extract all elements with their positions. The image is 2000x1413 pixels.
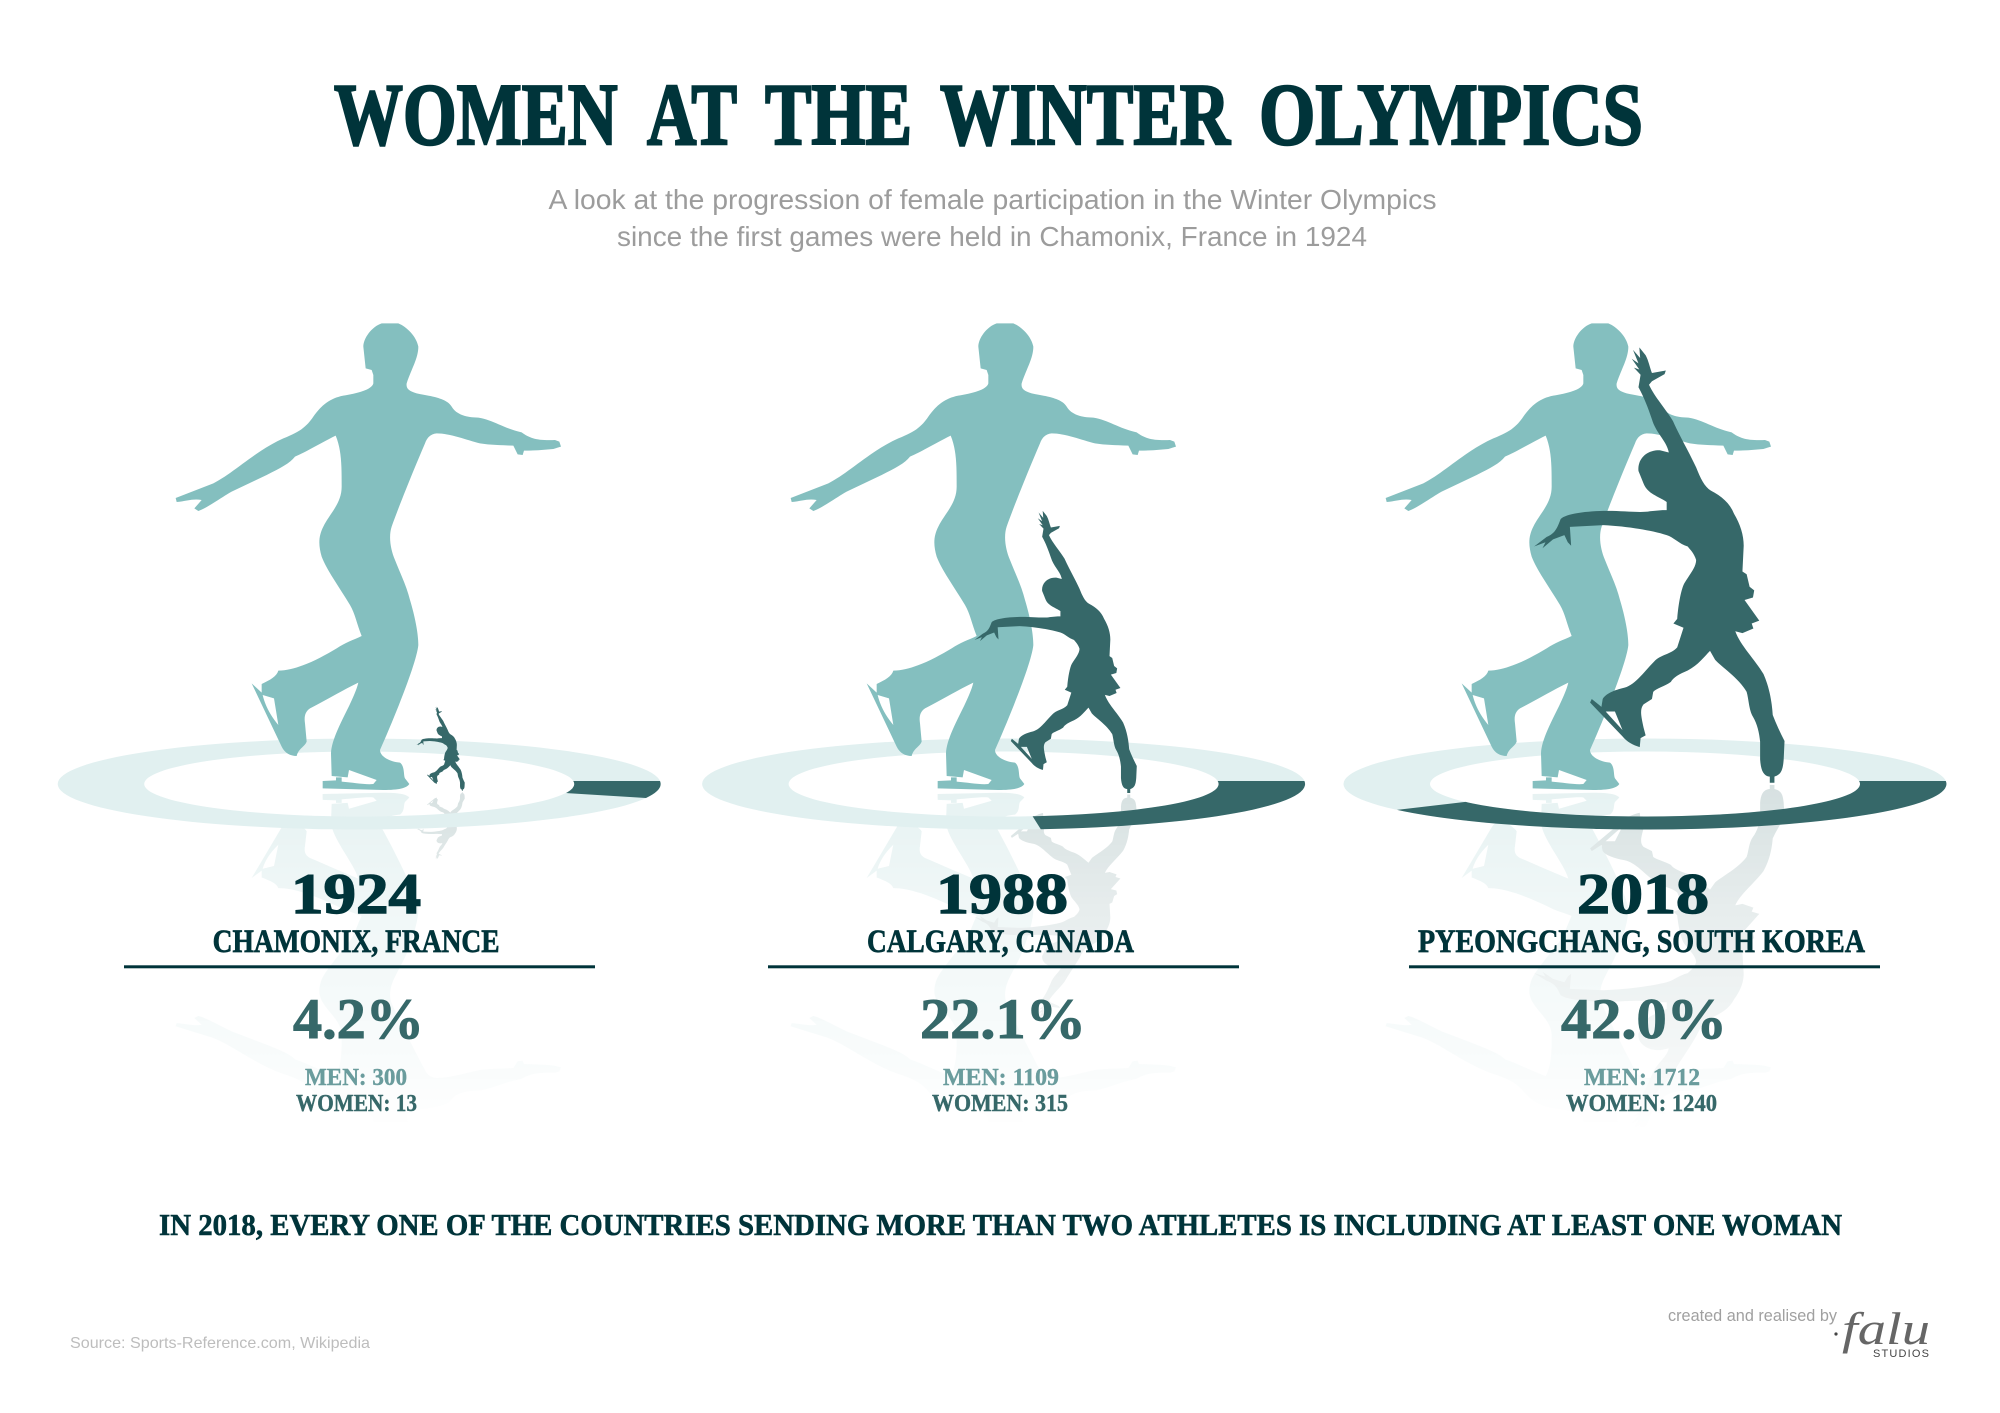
year and location 1924: 1924 — [291, 863, 421, 926]
panel: 1988 Calgary — [702, 323, 1305, 1117]
panel: 1924 Chamonix — [58, 323, 661, 1117]
year and location 2018: PYEONGCHANG, SOUTH KOREA — [1418, 924, 1865, 960]
credit and studio logo: STUDIOS — [1873, 1348, 1929, 1360]
year and location 2018: 2018 — [1577, 863, 1709, 926]
title — [334, 67, 1643, 164]
panel: 2018 Pyeongchang — [1344, 323, 1946, 1117]
credit and studio logo — [1668, 1303, 1930, 1360]
stats 1924: 4.2% — [293, 988, 424, 1051]
ice ring: 22.1 percent share — [702, 738, 1305, 830]
woman silhouette 1924 — [416, 707, 465, 791]
subtitle: A look at the progression of female participation in the Winter Olympics — [548, 184, 1436, 215]
year and location 1988: CALGARY, CANADA — [867, 924, 1134, 960]
stats 2018 — [1561, 988, 1727, 1117]
ice ring: 4.2 percent share — [58, 739, 661, 830]
credit and studio logo: falu — [1842, 1303, 1930, 1354]
subtitle — [548, 184, 1436, 252]
key takeaway statement: IN 2018, EVERY ONE OF THE COUNTRIES SENDING MORE THAN TWO ATHLETES IS INCLUDING AT LEAST ONE WOMAN — [159, 1207, 1842, 1242]
stats 1924: MEN: 300 — [305, 1065, 407, 1091]
year and location 1924: CHAMONIX, FRANCE — [213, 924, 500, 960]
reflections of the skaters on the ice — [195, 785, 1784, 1074]
woman silhouette 1988 — [975, 511, 1137, 793]
title: WINTER — [940, 67, 1231, 164]
year and location 2018 — [1409, 863, 1880, 968]
woman silhouette 2018 — [1534, 347, 1785, 783]
stats 1924 — [293, 988, 424, 1117]
year and location 1988 — [768, 863, 1239, 968]
man silhouette 1924 — [176, 323, 561, 790]
source note: Source: Sports-Reference.com, Wikipedia — [70, 1335, 370, 1352]
man silhouette 2018 — [1386, 323, 1771, 790]
stats 1924: WOMEN: 13 — [296, 1091, 417, 1117]
stats 1988 — [920, 988, 1086, 1117]
man silhouette 1988 — [791, 323, 1176, 790]
title: OLYMPICS — [1259, 67, 1643, 164]
ice ring: 42 percent share — [1344, 739, 1946, 830]
stats 1988: WOMEN: 315 — [932, 1091, 1068, 1117]
stats 1988: MEN: 1109 — [943, 1065, 1059, 1091]
title: AT — [647, 67, 737, 164]
stats 2018: 42.0% — [1561, 988, 1727, 1051]
title: WOMEN — [334, 67, 618, 164]
credit and studio logo: created and realised by — [1668, 1306, 1837, 1325]
stats 2018: WOMEN: 1240 — [1566, 1091, 1717, 1117]
subtitle: since the first games were held in Chamonix, France in 1924 — [617, 221, 1367, 252]
year and location 1988: 1988 — [936, 863, 1068, 926]
stats 2018: MEN: 1712 — [1584, 1065, 1700, 1091]
year and location 1924 — [124, 863, 595, 968]
stats 1988: 22.1% — [920, 988, 1086, 1051]
title: THE — [765, 67, 912, 164]
